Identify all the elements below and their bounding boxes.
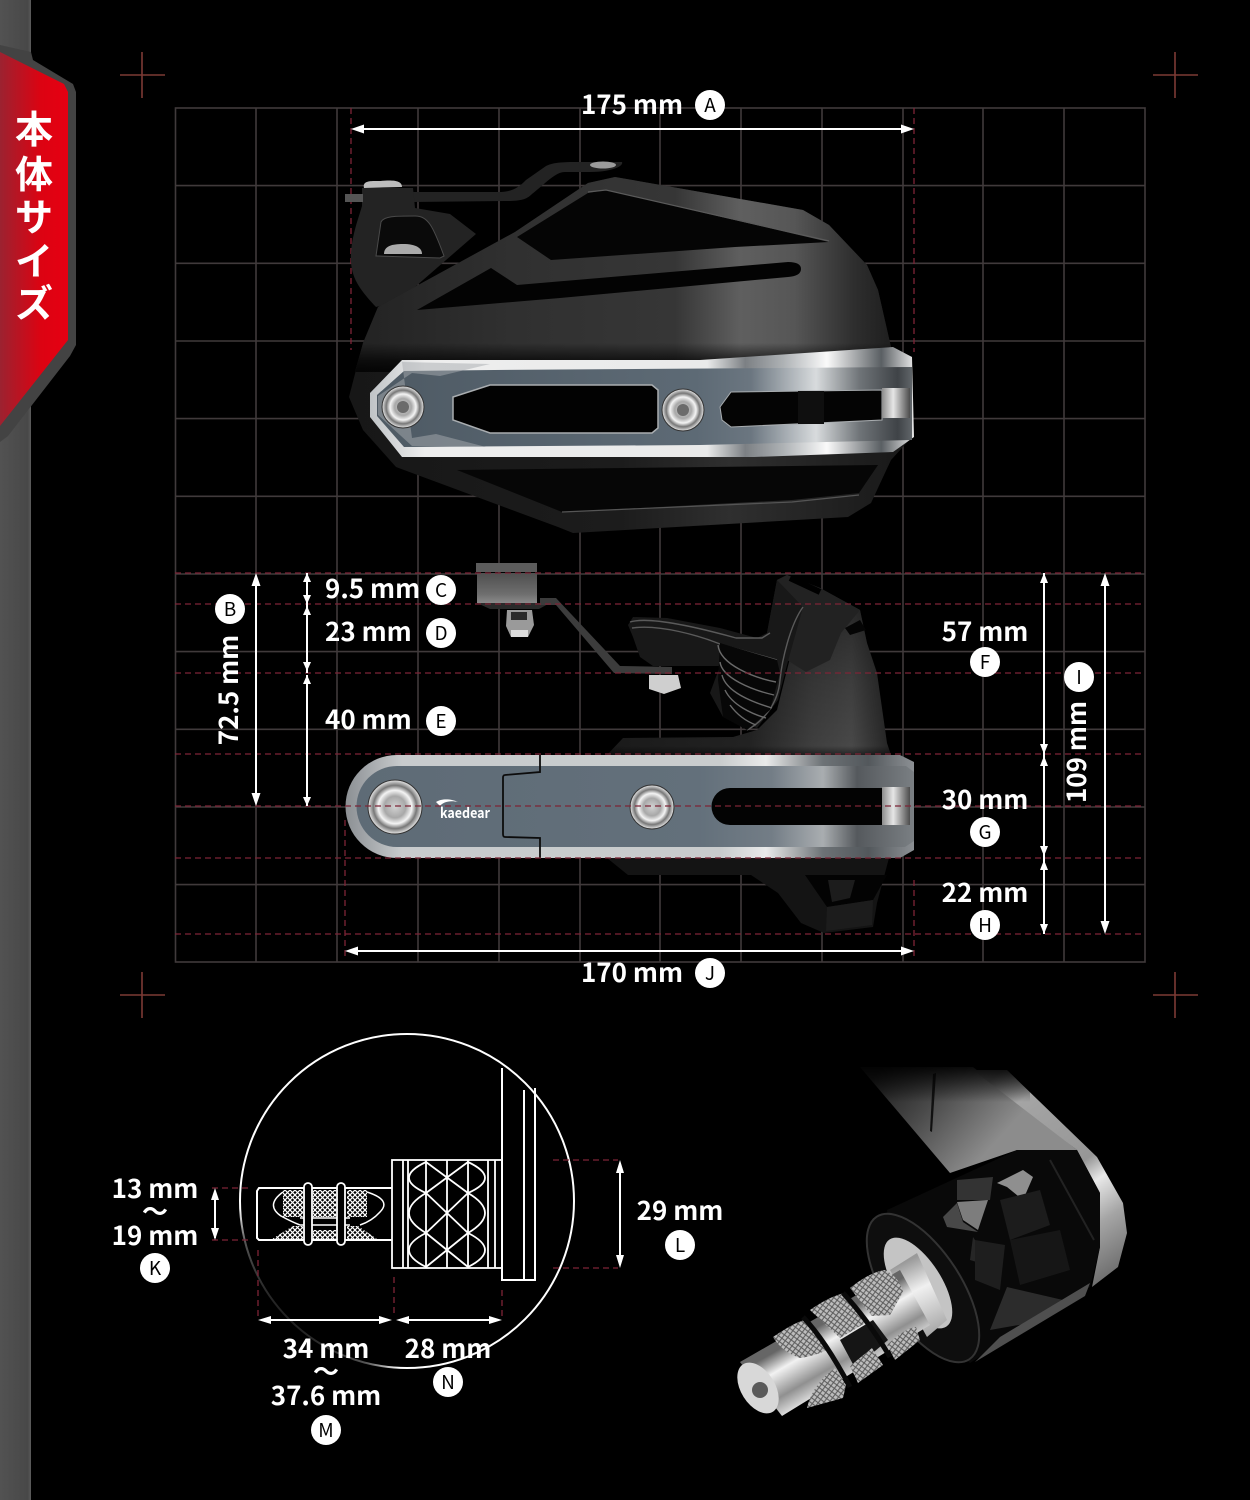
- dimension M: 34–37.6 mm: 37.6 mm: [271, 1376, 381, 1413]
- dimension C: 9.5 mm: [303, 569, 456, 606]
- rod knurl pads: [272, 1183, 384, 1245]
- dimension F: 57 mm: 57 mm: [942, 612, 1028, 649]
- flange outline: [502, 1068, 535, 1280]
- dimension C: 9.5 mm: 9.5 mm: [325, 569, 420, 606]
- rod outline: [257, 1188, 392, 1240]
- bracket: [476, 563, 537, 572]
- vent slit on cap: [845, 620, 866, 635]
- facets: [943, 1160, 1094, 1362]
- underside shell: [607, 858, 889, 933]
- dimension K: 13–19 mm: K: [149, 1254, 162, 1281]
- dimension K: 13–19 mm: 19 mm: [112, 1216, 198, 1253]
- arm plate: [860, 1067, 1077, 1173]
- upper window: [517, 190, 829, 260]
- lower window: [457, 465, 878, 512]
- crop marks: [120, 52, 1198, 1018]
- spring gap: [840, 1320, 888, 1368]
- faceted cylinder: [887, 1150, 1100, 1363]
- mounting arm: [412, 162, 622, 202]
- dimension A: 175 mm: 175 mm: [581, 85, 683, 122]
- mount block: [351, 188, 476, 307]
- dimension N: 28 mm: [396, 1290, 502, 1397]
- dimension F: 57 mm: [942, 573, 1048, 754]
- dimension L: 29 mm: [553, 1160, 723, 1268]
- dimension M: 34–37.6 mm: M: [318, 1416, 334, 1443]
- dimension K: 13–19 mm: ～: [142, 1192, 168, 1229]
- dimension M: 34–37.6 mm: 34 mm: [283, 1329, 369, 1366]
- product: top view of guard: [345, 162, 914, 533]
- dimension E: 40 mm: [303, 675, 456, 806]
- cylinder end disc: [845, 1196, 1001, 1380]
- dimension D: 23 mm: [303, 604, 456, 673]
- dimension N: 28 mm: 28 mm: [405, 1329, 491, 1366]
- bracket nuts: [506, 610, 534, 637]
- dimension H: 22 mm: H: [978, 911, 992, 938]
- dimension I: 109 mm: I: [1076, 663, 1082, 690]
- product: side view of guard: [346, 563, 914, 933]
- dimension I: 109 mm: 109 mm: [1057, 701, 1094, 803]
- side slot: [417, 262, 801, 310]
- dimension C: 9.5 mm: C: [435, 576, 447, 603]
- dimension N: 28 mm: N: [441, 1368, 455, 1395]
- dimension L: 29 mm: 29 mm: [637, 1191, 723, 1228]
- dimension L: 29 mm: L: [675, 1231, 685, 1258]
- dimension A: 175 mm: A: [704, 91, 716, 118]
- knurled pads: [773, 1320, 827, 1358]
- dimension B: 72.5 mm: B: [224, 595, 236, 622]
- ribs: [718, 645, 776, 725]
- dimension E: 40 mm: 40 mm: [325, 700, 412, 737]
- ribbon label: 本体サイズ: [15, 99, 53, 328]
- dimension K: 13–19 mm: [112, 1169, 248, 1283]
- side shell: [607, 575, 891, 755]
- vent openings: [453, 385, 658, 433]
- dimension B: 72.5 mm: 72.5 mm: [209, 635, 246, 745]
- dimension G: 30 mm: 30 mm: [942, 780, 1028, 817]
- threaded rod: [740, 1270, 930, 1416]
- rib panel: [718, 643, 780, 730]
- end clip: [882, 388, 910, 418]
- magnifier ring: [240, 1034, 574, 1368]
- dimension B: 72.5 mm: [209, 586, 256, 793]
- dimension J: 170 mm: 170 mm: [581, 953, 683, 990]
- slot: [712, 788, 882, 825]
- brand logo: kaedear: [440, 803, 491, 823]
- dimension H: 22 mm: 22 mm: [942, 873, 1028, 910]
- slate plate: [377, 367, 912, 447]
- cap: [767, 575, 860, 672]
- dimension J: 170 mm: [358, 951, 901, 990]
- dimension D: 23 mm: D: [434, 619, 448, 646]
- dimension G: 30 mm: [942, 754, 1048, 858]
- rod tip: [729, 1355, 787, 1421]
- hand rest rim: [630, 607, 803, 730]
- silver arm edge: [973, 1070, 1127, 1287]
- side plate with slot: [346, 755, 914, 858]
- silver band: [370, 347, 914, 457]
- section ribbon: body size: [0, 45, 76, 442]
- knurled body outline: [392, 1160, 502, 1268]
- side bolts: [368, 780, 422, 834]
- bolts: [382, 386, 424, 428]
- guard shell: [349, 177, 912, 533]
- dimension guides for side view: [175, 573, 1145, 958]
- dimension I: 109 mm: [1057, 586, 1105, 921]
- hinge seam: [503, 755, 540, 858]
- dimension J: 170 mm: J: [705, 959, 715, 986]
- dimension H: 22 mm: [942, 858, 1048, 940]
- dimension A: 175 mm: [364, 85, 901, 129]
- measurement grid: [175, 108, 1145, 962]
- product photo: bar end weight: [729, 1062, 1127, 1421]
- dimension M: 34–37.6 mm: [258, 1250, 394, 1445]
- dimension F: 57 mm: F: [980, 648, 990, 675]
- left side strip: [0, 0, 31, 1500]
- rubber rings: [803, 1293, 890, 1387]
- dimension G: 30 mm: G: [978, 818, 992, 845]
- bracket arm: [540, 598, 672, 674]
- dimension D: 23 mm: 23 mm: [325, 612, 412, 649]
- dimension K: 13–19 mm: 13 mm: [112, 1169, 198, 1206]
- fade on top of arm: [850, 1062, 1030, 1102]
- rod base: [890, 1253, 947, 1337]
- dimension E: 40 mm: E: [435, 707, 447, 734]
- dimension M: 34–37.6 mm: ～: [313, 1352, 339, 1389]
- detail circle with line drawing: [240, 1034, 574, 1368]
- dimension guides for top view: [351, 108, 914, 352]
